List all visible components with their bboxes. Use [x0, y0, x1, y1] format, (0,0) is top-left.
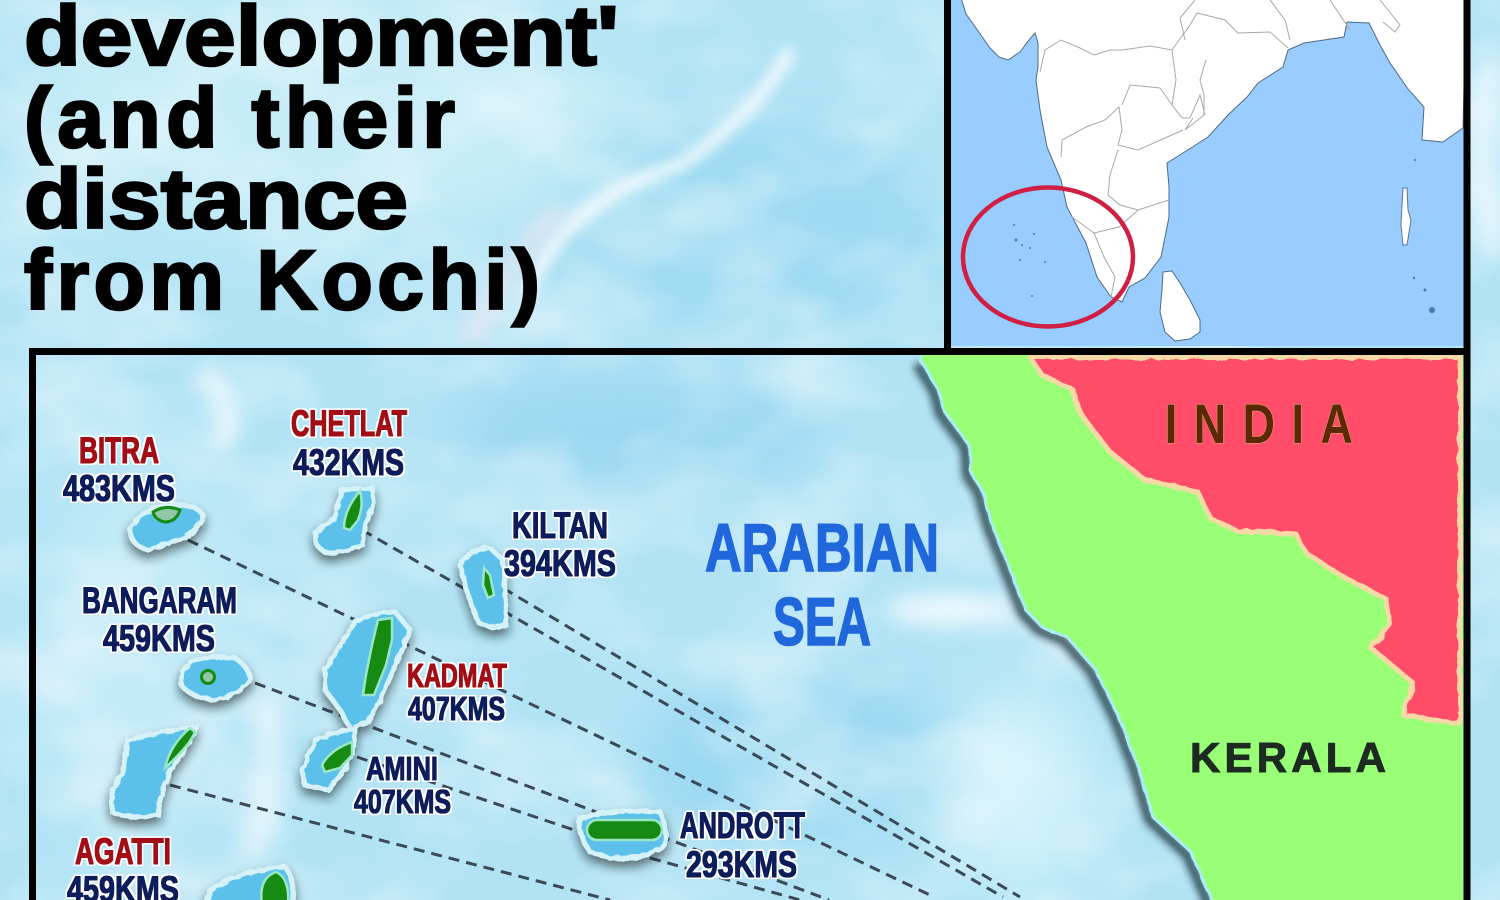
island: Amini — [302, 728, 355, 790]
label: Arabian Sea — [705, 524, 936, 646]
label: Chetlat — [290, 408, 409, 478]
label: Agatti — [67, 831, 179, 900]
label: Chetlat: 432KMS — [293, 442, 404, 483]
island: Agatti — [112, 727, 196, 817]
island: Chetlat — [315, 488, 373, 553]
label: Kadmat — [406, 662, 509, 722]
label: Kiltan: KILTAN — [512, 505, 608, 546]
Kerala landmass — [921, 350, 1475, 900]
island: Andrott — [580, 811, 666, 858]
island: Kadmat — [325, 612, 410, 728]
island: Kiltan — [460, 548, 506, 627]
panel: India locator map — [951, 0, 1466, 346]
title — [24, 0, 619, 327]
label: Andrott: ANDROTT — [680, 805, 805, 846]
label: Kiltan: 394KMS — [504, 543, 616, 584]
label: Kiltan — [502, 510, 617, 578]
label: Agatti: AGATTI — [75, 831, 171, 872]
state borders — [1040, 0, 1400, 297]
label: Bitra: BITRA — [79, 430, 159, 471]
title: from Kochi) — [24, 233, 540, 327]
label: Bitra — [61, 435, 176, 504]
island: Kavaratti — [205, 867, 293, 900]
label: Bangaram — [82, 585, 238, 654]
icon: red circle highlighting Lakshadweep — [963, 188, 1133, 326]
label: Arabian Sea: ARABIAN — [705, 510, 939, 586]
label: Amini: AMINI — [366, 750, 438, 787]
label: Bangaram: 459KMS — [103, 618, 215, 659]
label: Amini — [352, 755, 452, 816]
label: Bangaram: BANGARAM — [82, 580, 237, 621]
India region — [1030, 357, 1460, 724]
icon: Andaman islands — [1401, 188, 1411, 245]
panel: Lakshadweep map — [63, 350, 1475, 900]
island: Bangaram — [181, 657, 250, 700]
frame: locator map border — [948, 0, 1467, 349]
title: (and their — [24, 71, 455, 165]
label: Kadmat: KADMAT — [407, 657, 507, 694]
label: Chetlat: CHETLAT — [291, 403, 407, 444]
label: Kadmat: 407KMS — [408, 690, 505, 727]
label: Andrott: 293KMS — [686, 844, 797, 885]
label: Bitra: 483KMS — [63, 468, 175, 509]
coast shadow — [917, 364, 1210, 900]
island: Bitra — [130, 505, 203, 550]
label: Andrott — [678, 810, 807, 880]
icon: Maldives and Lakshadweep dots — [1013, 159, 1435, 313]
label: Amini: 407KMS — [354, 783, 451, 820]
icon: Sri Lanka — [1160, 271, 1200, 341]
label: INDIA: INDIA — [1165, 392, 1353, 455]
dashed route lines — [170, 530, 1020, 900]
label: Arabian Sea: SEA — [773, 584, 871, 660]
frame: main map border — [32, 352, 1467, 900]
label: KERALA: KERALA — [1190, 734, 1386, 781]
title: distance — [24, 152, 408, 246]
icon: India mainland — [961, 0, 1466, 302]
